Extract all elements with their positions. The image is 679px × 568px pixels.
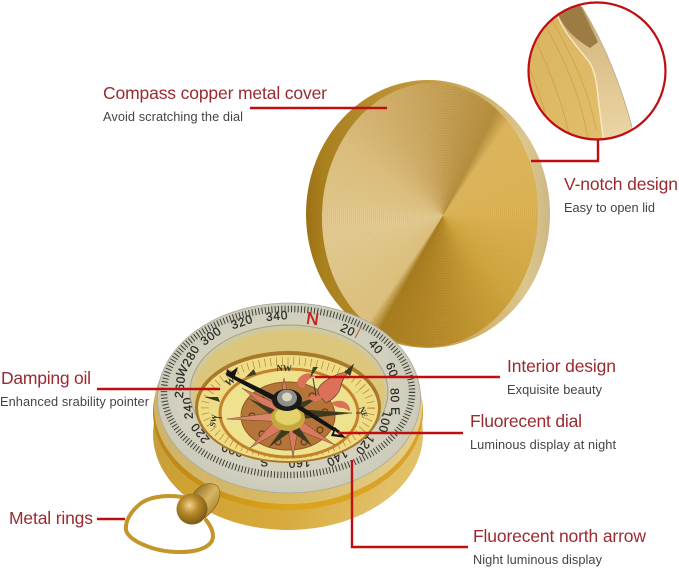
dial rim — [195, 351, 381, 463]
dial letters: SW — [208, 414, 219, 427]
callout: v-notch: V-notch design — [564, 174, 678, 194]
dial letters: NW — [276, 363, 292, 373]
compass rose — [214, 378, 362, 457]
bezel numbers: 260 — [172, 375, 188, 399]
compass body — [153, 303, 423, 530]
case lip — [153, 314, 423, 510]
callout: cover: Compass copper metal cover — [103, 83, 327, 103]
case — [153, 338, 423, 530]
bezel numbers: 220 — [188, 420, 212, 446]
rose ornaments — [249, 393, 328, 445]
dial face — [198, 355, 378, 461]
metal ring — [126, 496, 213, 552]
dial letters: W — [223, 375, 238, 389]
bezel numbers: 320 — [229, 312, 255, 332]
inset content — [530, 6, 632, 138]
bezel numbers: 300 — [198, 324, 224, 348]
glass window — [190, 325, 388, 459]
pivot base — [271, 405, 305, 431]
compass needle — [226, 367, 346, 438]
rose disc — [241, 382, 335, 450]
callout: damping oil: Enhanced srability pointer — [0, 394, 150, 409]
dial letters: NE — [357, 405, 369, 419]
callout: fluorescent dial — [338, 411, 616, 452]
fleur de lis — [297, 365, 353, 411]
bezel numbers: 60 — [383, 361, 401, 379]
lid brushed disc — [315, 78, 545, 352]
callout: interior design: Interior design — [507, 356, 616, 376]
callout: interior design — [315, 356, 616, 397]
bezel numbers: 100 — [376, 410, 394, 434]
bezel numbers: 160 — [287, 455, 311, 471]
bezel numbers: 140 — [324, 446, 350, 470]
callout: fluorescent dial: Luminous display at night — [470, 437, 616, 452]
bezel numbers: 40 — [366, 337, 386, 357]
dial scale — [205, 361, 371, 455]
bezel numbers: 20 — [338, 320, 358, 340]
callout: fluorescent dial: Fluorecent dial — [470, 411, 582, 431]
bezel — [158, 303, 420, 493]
callout: damping oil: Damping oil — [1, 368, 91, 388]
inset ring — [528, 2, 666, 140]
callout: v-notch: Easy to open lid — [564, 200, 655, 215]
bezel numbers — [172, 308, 402, 471]
magnified v-notch inset — [520, 0, 667, 141]
bezel numbers: S — [260, 455, 268, 469]
callout: interior design: Exquisite beauty — [507, 382, 603, 397]
dial orange ring — [220, 369, 358, 457]
bezel numbers: 340 — [265, 308, 289, 324]
callout: metal rings: Metal rings — [9, 508, 93, 528]
small dial markers — [204, 367, 366, 402]
callout: north arrow: Fluorecent north arrow — [473, 526, 646, 546]
bezel numbers: 200 — [219, 440, 245, 460]
north mark: N — [305, 309, 321, 329]
bezel numbers: 120 — [353, 432, 377, 458]
bezel ticks — [164, 309, 412, 475]
callout: v-notch — [531, 140, 678, 215]
callout: damping oil — [0, 368, 220, 409]
bezel numbers: 80 E — [388, 388, 402, 416]
callout: north arrow — [352, 460, 646, 567]
pivot — [272, 389, 302, 411]
lid rim — [306, 80, 550, 348]
compass lid — [306, 78, 550, 352]
dial letters — [208, 363, 369, 427]
callout: cover — [103, 83, 387, 124]
ring knob — [176, 484, 220, 524]
bezel numbers: W280 — [173, 343, 203, 379]
callout: cover: Avoid scratching the dial — [103, 109, 243, 124]
bezel numbers: 240 — [180, 396, 196, 420]
callout: north arrow: Night luminous display — [473, 552, 603, 567]
